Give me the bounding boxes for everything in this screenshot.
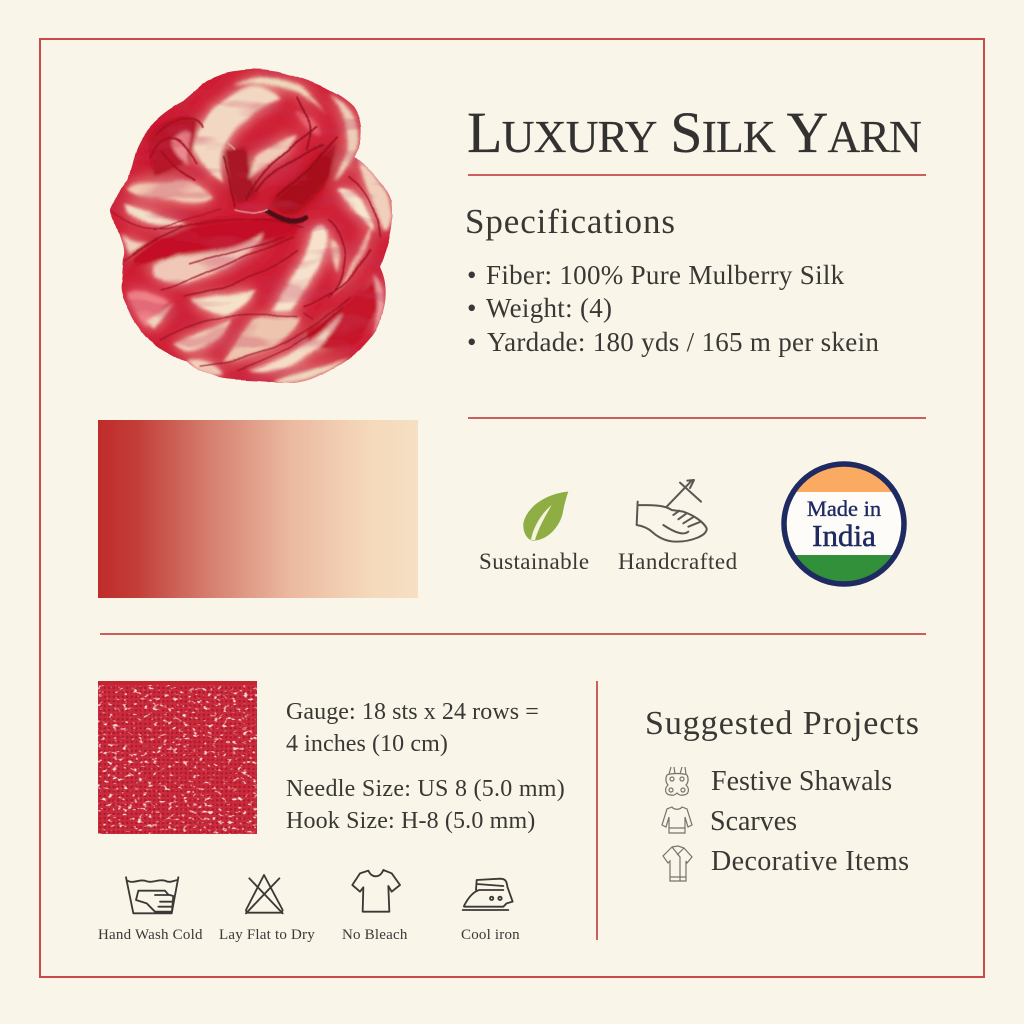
badge: made in india: India [812,518,876,553]
suggested projects heading: Suggested Projects [645,705,920,742]
gauge and needle text [286,699,565,834]
badge: made in india: Made in [807,496,881,521]
colour gradient swatch [98,420,418,598]
knit gauge swatch [98,681,257,834]
care labels: Hand Wash Cold [98,927,203,943]
specifications list: Fiber: 100% Pure Mulberry Silk [486,260,844,290]
project label: festive shawals: Festive Shawals [711,766,892,797]
care icon: lay flat [246,875,283,913]
care labels: Lay Flat to Dry [219,927,315,943]
specifications heading: Specifications [465,202,676,241]
project label: scarves: Scarves [710,806,797,837]
specifications list: • [467,293,477,323]
gauge and needle text: Gauge: 18 sts x 24 rows = [286,699,539,725]
gauge and needle text: 4 inches (10 cm) [286,731,448,757]
specifications list [467,260,879,357]
care icon: shirt [352,870,400,912]
gauge and needle text: Needle Size: US 8 (5.0 mm) [286,776,565,802]
yarn skein image [110,68,392,384]
badge: made in india [781,461,907,587]
care icon: hand wash [126,877,178,913]
care labels: No Bleach [342,927,408,943]
care icon: iron [463,879,513,910]
project icon: scarf top [661,806,693,834]
specifications list: Weight: (4) [486,293,612,323]
project icon: robe [662,845,693,882]
title: LUXURY SILK YARN [467,100,921,165]
specifications list: • [467,260,477,290]
gauge and needle text: Hook Size: H-8 (5.0 mm) [286,808,535,834]
care labels [98,927,520,943]
specifications list: Yardade: 180 yds / 165 m per skein [487,327,879,357]
handcrafted label: Handcrafted [618,549,738,574]
specifications list: • [467,327,477,357]
project icon: shawl [664,766,689,796]
project label: decorative items: Decorative Items [711,846,909,877]
care labels: Cool iron [461,927,520,943]
sustainable label: Sustainable [479,549,589,574]
